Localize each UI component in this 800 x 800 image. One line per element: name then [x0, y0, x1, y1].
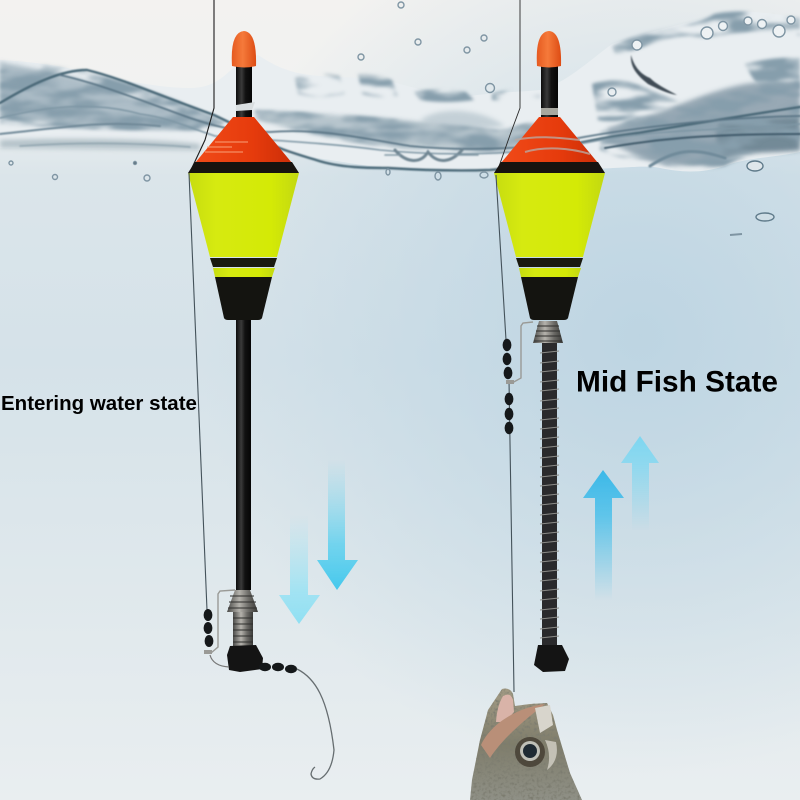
weight block: [227, 645, 263, 672]
fish body: [470, 689, 582, 800]
fish cheek: [545, 740, 557, 770]
fishing line: top left: [190, 0, 214, 172]
fishing line: top right: [496, 0, 520, 175]
leaping droplet shape: [631, 55, 677, 95]
arrow: down light: [279, 515, 320, 624]
bubbles: [9, 2, 795, 235]
fish mouth: [496, 695, 514, 722]
side wire bracket: [211, 590, 235, 653]
extended threaded stem: [540, 343, 559, 650]
side wire bracket: [512, 322, 533, 383]
float body: [188, 117, 299, 320]
fish scale texture: [465, 685, 585, 800]
label: entering water state: Entering water state: [1, 392, 197, 415]
hook leader with beads: [259, 663, 334, 779]
float antenna and tip: [232, 31, 256, 118]
weight block: [534, 645, 569, 672]
float: entering water state: [188, 31, 334, 779]
arrow: up dark: [583, 470, 624, 600]
float antenna and tip: [537, 31, 561, 118]
side line with beads: [189, 173, 229, 667]
fish snout: [535, 705, 553, 733]
fish eye: [515, 737, 545, 767]
compressed stem: [227, 320, 258, 646]
arrow: down dark: [317, 460, 358, 590]
float: mid fish state: [494, 31, 605, 692]
fish: [465, 685, 585, 800]
fish jaw: [481, 704, 545, 758]
float body: [494, 117, 605, 320]
arrow: up light: [621, 436, 659, 530]
side line with beads: [496, 175, 514, 692]
spring collar: [533, 321, 563, 343]
label: mid fish state: Mid Fish State: [576, 366, 778, 398]
water surface splash: [0, 0, 800, 200]
